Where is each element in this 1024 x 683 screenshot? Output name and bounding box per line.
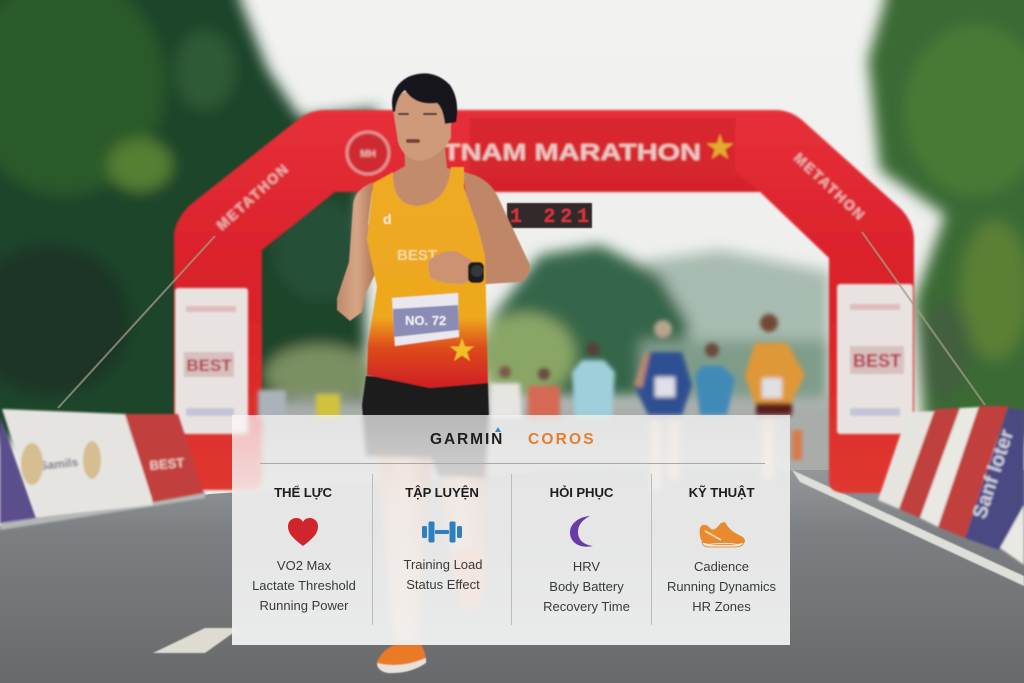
arch logo xyxy=(347,132,389,174)
mid-ground haze xyxy=(255,398,845,528)
metrics: Running Power xyxy=(260,598,348,613)
metrics: Lactate Threshold xyxy=(252,578,356,593)
column: the luc xyxy=(252,485,356,613)
inflatable finish arch xyxy=(174,110,914,493)
distant hills xyxy=(475,245,830,410)
runner lead shoe xyxy=(377,643,426,673)
metrics: Body Battery xyxy=(549,579,624,594)
icon: running shoe xyxy=(700,522,745,548)
metrics: HRV xyxy=(573,559,600,574)
foreground runner xyxy=(337,73,530,673)
metrics: VO2 Max xyxy=(277,558,331,573)
runner hand xyxy=(428,251,474,284)
trees left xyxy=(0,0,378,440)
runner face xyxy=(393,90,451,161)
left arch banner xyxy=(175,288,248,434)
runner left arm xyxy=(337,182,377,321)
runner legs xyxy=(378,450,488,642)
metrics xyxy=(403,557,482,592)
icon: moon xyxy=(570,516,593,547)
icon: dumbbell xyxy=(422,522,462,542)
heading: HỎI PHỤC xyxy=(550,485,613,500)
right barrier boards xyxy=(878,406,1024,565)
runner hair xyxy=(392,73,457,124)
right barrier boards: Sanf loter xyxy=(969,427,1018,522)
runner bib number: NO. 72 xyxy=(405,313,446,328)
timing clock: 1 221 xyxy=(510,206,589,229)
runner chest star xyxy=(450,338,474,361)
runner shorts xyxy=(362,376,489,478)
icon: heart xyxy=(288,518,318,546)
left barrier boards xyxy=(0,409,204,523)
garmin logo: GARMIN xyxy=(430,431,504,448)
arch banner text: TNAM MARATHON xyxy=(443,139,701,165)
road xyxy=(0,470,1024,683)
runner watch xyxy=(468,262,484,283)
metrics: Recovery Time xyxy=(543,599,630,614)
heading: TẬP LUYỆN xyxy=(405,485,479,500)
heading: THỂ LỰC xyxy=(274,485,332,500)
arch star xyxy=(706,134,734,159)
metrics: Status Effect xyxy=(406,577,480,592)
runner neck and chest xyxy=(390,135,465,220)
arch guy ropes xyxy=(58,232,985,408)
left barrier boards: Samils xyxy=(39,455,79,473)
metrics: Training Load xyxy=(403,557,482,572)
brand logos row xyxy=(430,427,596,448)
runner right arm xyxy=(450,172,530,284)
info panel xyxy=(232,415,790,645)
metrics: HR Zones xyxy=(692,599,751,614)
runner singlet xyxy=(367,167,488,388)
arch logo: MH xyxy=(360,149,376,160)
metrics: Running Dynamics xyxy=(667,579,776,594)
runner bib number xyxy=(392,293,459,346)
column: tap luyen xyxy=(403,485,482,592)
background runners xyxy=(258,314,805,490)
metrics: Cadience xyxy=(694,559,749,574)
right arch banner xyxy=(837,284,913,434)
coros logo: COROS xyxy=(528,431,596,448)
arch side text left: METATHON xyxy=(213,161,291,233)
left barrier boards: BEST xyxy=(149,455,185,473)
runner chest logo mark: d xyxy=(383,211,392,227)
left arch banner: BEST xyxy=(186,356,232,375)
metrics xyxy=(667,559,776,614)
runner chest text: BEST xyxy=(397,247,437,264)
metrics xyxy=(252,558,356,613)
column: hoi phuc xyxy=(543,485,630,614)
arch side text right: METATHON xyxy=(791,149,868,223)
column: ky thuat xyxy=(667,485,776,614)
right arch banner: BEST xyxy=(853,351,901,371)
trees right xyxy=(868,0,1024,440)
heading: KỸ THUẬT xyxy=(689,485,754,500)
runner facial features xyxy=(398,113,437,143)
metrics xyxy=(543,559,630,614)
runner trailing shoe xyxy=(453,548,485,611)
